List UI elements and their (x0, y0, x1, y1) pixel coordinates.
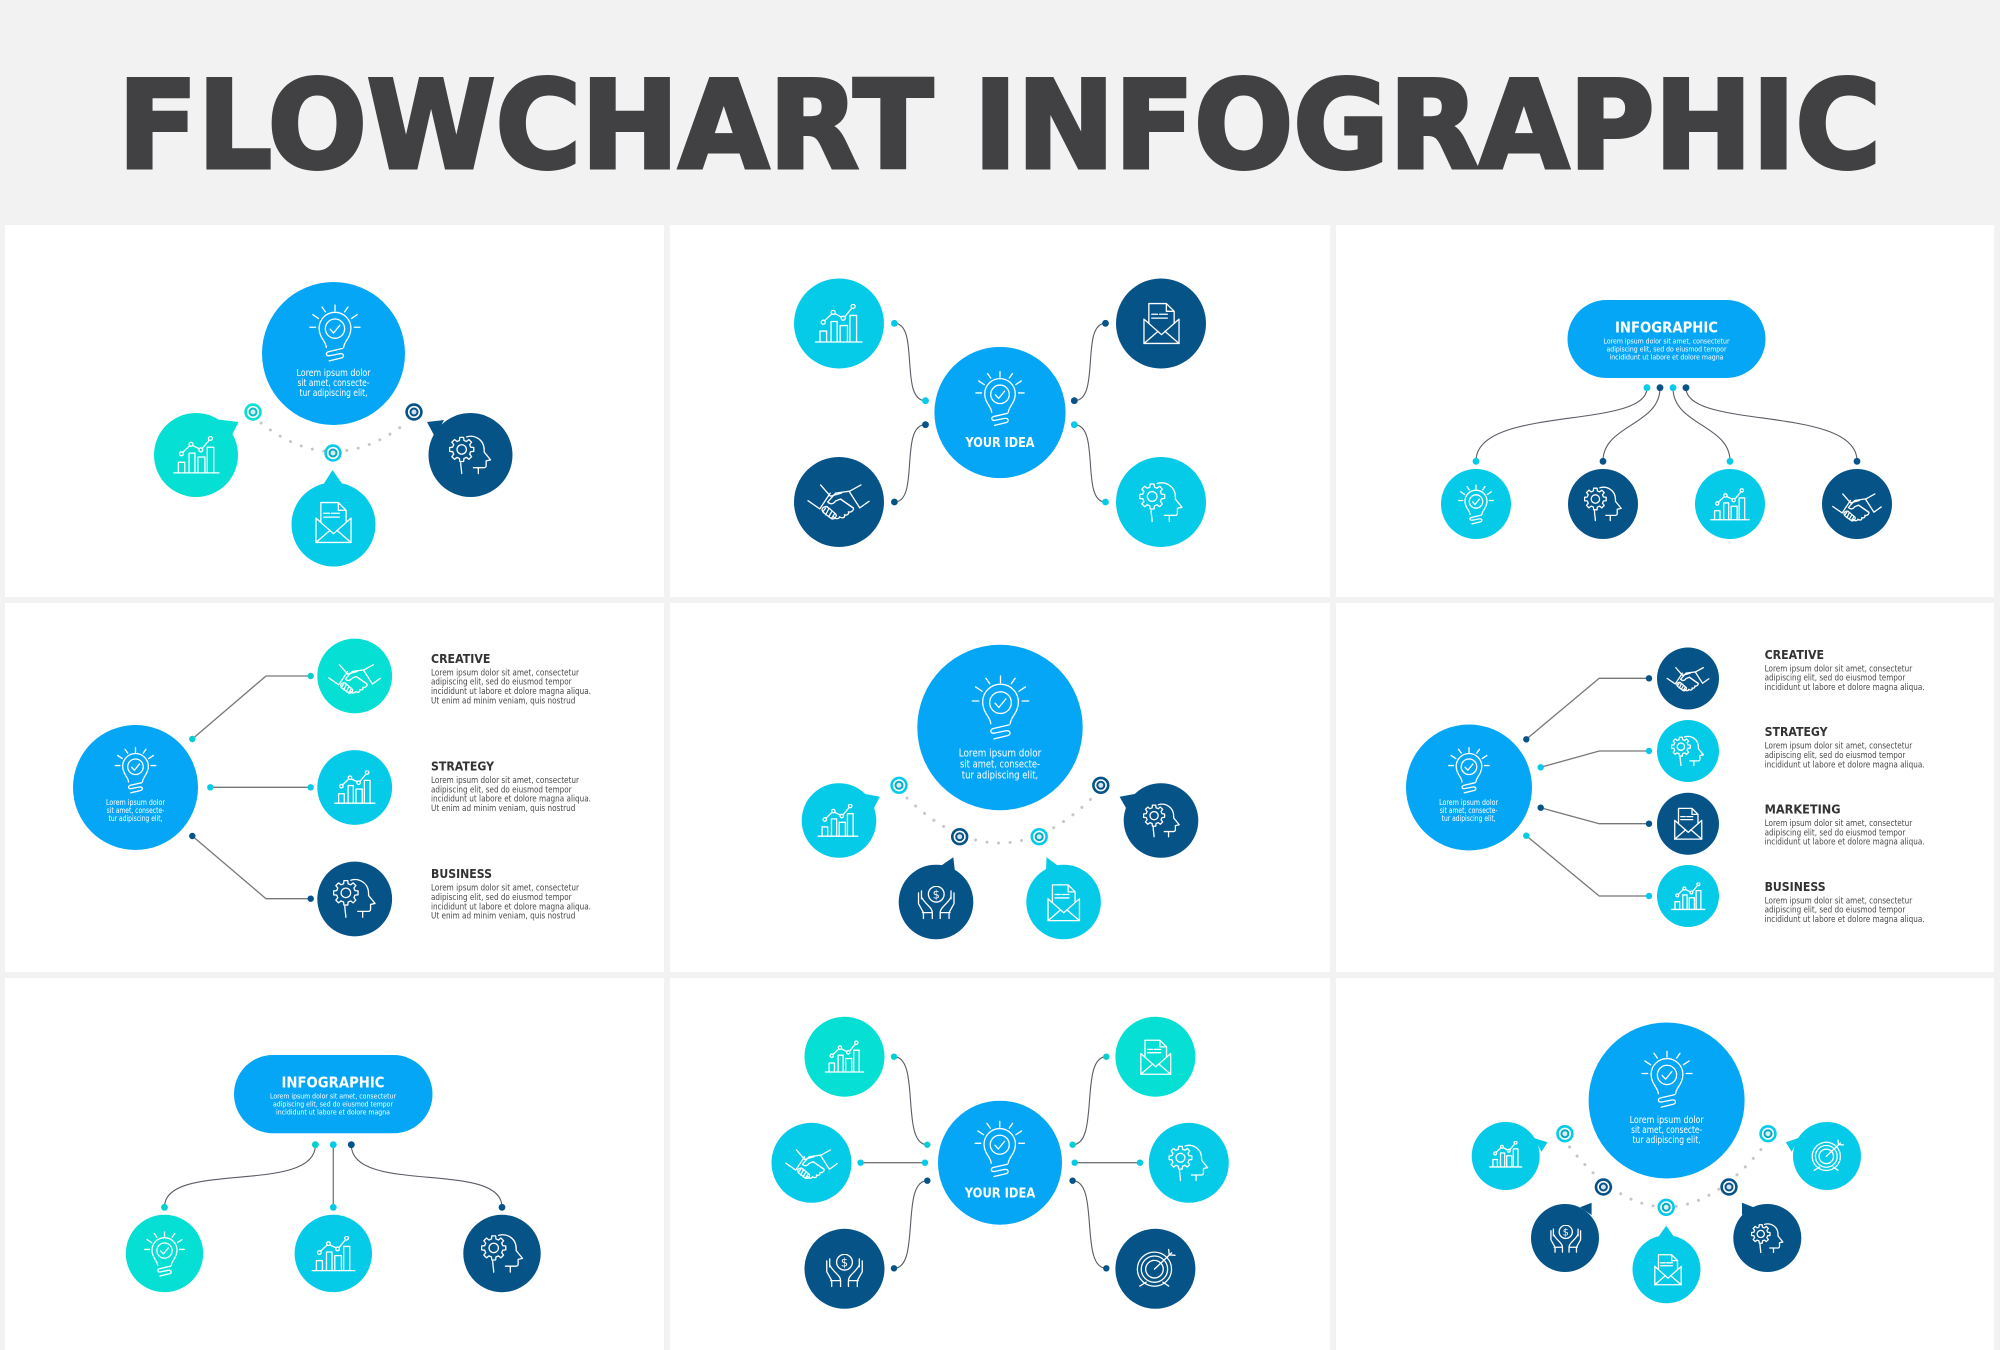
bubble: head (427, 413, 512, 497)
marker: left ring (246, 405, 260, 419)
connector 1 (1473, 384, 1650, 465)
title: FLOWCHART INFOGRAPHIC (118, 54, 1881, 196)
text block: strategy: incididunt ut labore et dolore magna aliqua. (1765, 760, 1925, 770)
text block: strategy: STRATEGY (1765, 725, 1828, 740)
connector bottom right (1069, 1178, 1110, 1272)
text block: business: Lorem ipsum dolor sit amet, consectetur (431, 884, 579, 894)
central circle your idea (938, 1101, 1062, 1225)
circle: chart (317, 750, 392, 825)
dotted arc (261, 423, 406, 452)
pill heading: INFOGRAPHIC (1615, 318, 1718, 336)
circle: envelope (1116, 278, 1206, 368)
dotted arc (1570, 1147, 1763, 1207)
panel: idea with six branches (670, 978, 1330, 1350)
circle: dollar hands (804, 1229, 884, 1309)
circle: head (463, 1215, 541, 1292)
text block: business (431, 867, 591, 922)
text block: strategy: Ut enim ad minim veniam, quis nostrud (431, 804, 575, 814)
bubble: envelope (1026, 857, 1101, 939)
pill heading: Lorem ipsum dolor sit amet, consectetur (1604, 336, 1730, 345)
bubble: envelope (292, 470, 376, 566)
connector middle right (1072, 1160, 1143, 1166)
circle: head (1116, 457, 1206, 547)
circle: envelope (1115, 1017, 1195, 1097)
central circle with bulb: sit amet, consecte- (298, 378, 370, 389)
circle: chart (1657, 865, 1719, 927)
central circle: tur adipiscing elit, (1442, 814, 1496, 823)
bubble: envelope (1632, 1226, 1700, 1303)
connector: creative (1523, 675, 1652, 742)
circle: chart (295, 1215, 372, 1292)
marker ring 1 (1558, 1126, 1572, 1141)
central circle your idea: YOUR IDEA (964, 1186, 1036, 1202)
central circle with bulb: sit amet, consecte- (960, 758, 1040, 770)
panel: radial four speech bubbles (670, 603, 1330, 972)
text block: marketing: MARKETING (1765, 802, 1841, 818)
text block: strategy: Lorem ipsum dolor sit amet, consectetur (1765, 742, 1913, 752)
circle: handshake (772, 1123, 852, 1203)
pill heading: Lorem ipsum dolor sit amet, consectetur (270, 1091, 397, 1100)
circle: bulb (1441, 469, 1511, 539)
circle: envelope (1657, 793, 1719, 855)
text block: business: Ut enim ad minim veniam, quis nostrud (431, 912, 575, 922)
central circle: Lorem ipsum dolor (1439, 798, 1499, 807)
connector: strategy (1538, 748, 1652, 770)
bubble: head (1733, 1203, 1801, 1272)
circle: handshake (1822, 469, 1892, 539)
central circle your idea: YOUR IDEA (965, 435, 1035, 451)
connector middle left (857, 1160, 928, 1166)
connector 4 (1683, 384, 1860, 465)
bubble: dollar hands (899, 857, 973, 939)
circle: handshake (794, 457, 884, 547)
circle: head (1568, 469, 1638, 539)
central circle with bulb: Lorem ipsum dolor (1630, 1115, 1704, 1126)
text block: creative: adipiscing elit, sed do eiusmod tempor (1765, 674, 1906, 684)
text block: business: incididunt ut labore et dolore magna aliqua. (431, 902, 591, 912)
bubble: chart (802, 783, 880, 858)
panel: idea with four branches (670, 225, 1330, 597)
central circle: tur adipiscing elit, (108, 814, 162, 823)
pill heading: adipiscing elit, sed do eiusmod tempor (1606, 344, 1727, 353)
connector bottom left (891, 1178, 930, 1272)
marker ring 4 (1093, 778, 1108, 793)
text block: creative (1765, 648, 1925, 693)
central circle with bulb (1589, 1022, 1745, 1178)
connector: bottom left (891, 421, 929, 505)
connector: marketing (1538, 804, 1652, 827)
central circle with bulb: Lorem ipsum dolor (959, 747, 1042, 759)
central circle with bulb: tur adipiscing elit, (300, 388, 368, 399)
text block: business (1765, 880, 1925, 925)
pill heading: incididunt ut labore et dolore magna (276, 1107, 390, 1116)
circle: chart (804, 1017, 884, 1097)
text block: creative: Lorem ipsum dolor sit amet, consectetur (1765, 664, 1913, 674)
connector: bottom right (1071, 421, 1109, 505)
central circle: Lorem ipsum dolor (106, 798, 166, 807)
text block: creative: Lorem ipsum dolor sit amet, consectetur (431, 668, 579, 678)
text block: creative (431, 652, 591, 706)
connector top right (1069, 1054, 1110, 1148)
text block: strategy (1765, 725, 1925, 770)
text block: creative: CREATIVE (1765, 648, 1824, 663)
text block: creative: CREATIVE (431, 652, 490, 667)
panel: four branches with text (1336, 603, 1994, 972)
bubble: chart (154, 413, 238, 497)
text block: creative: incididunt ut labore et dolore magna aliqua. (1765, 683, 1925, 693)
text block: strategy: adipiscing elit, sed do eiusmod tempor (431, 785, 572, 795)
text block: business: adipiscing elit, sed do eiusmod tempor (1765, 906, 1906, 916)
pill heading (234, 1055, 432, 1133)
marker: middle ring (326, 446, 340, 460)
text block: marketing: adipiscing elit, sed do eiusmod tempor (1765, 828, 1906, 838)
connector: business (1523, 832, 1652, 899)
panel: infographic pill with three branches (5, 978, 664, 1350)
circle: head (317, 862, 392, 936)
marker ring 3 (1659, 1200, 1674, 1215)
marker ring 5 (1761, 1126, 1775, 1141)
connector right (348, 1141, 505, 1211)
circle: handshake (317, 639, 392, 713)
pill heading: INFOGRAPHIC (282, 1073, 384, 1091)
marker ring 1 (892, 778, 906, 793)
text block: strategy: incididunt ut labore et dolore magna aliqua. (431, 795, 591, 805)
pill heading: incididunt ut labore et dolore magna (1610, 352, 1724, 361)
text block: strategy: Lorem ipsum dolor sit amet, consectetur (431, 776, 579, 786)
central circle (1406, 724, 1532, 850)
bubble: target (1786, 1122, 1861, 1190)
central circle (73, 725, 198, 850)
bubble: chart (1472, 1122, 1548, 1190)
circle: handshake (1657, 648, 1719, 710)
circle: bulb (126, 1215, 203, 1292)
text block: strategy: STRATEGY (431, 760, 495, 774)
connector top left (891, 1054, 930, 1148)
marker ring 2 (952, 829, 967, 844)
central circle: sit amet, consecte- (1440, 806, 1498, 815)
text block: business: incididunt ut labore et dolore magna aliqua. (1765, 915, 1925, 925)
connector: top left (891, 320, 929, 404)
marker ring 4 (1722, 1180, 1736, 1194)
panel: three branches with text (5, 603, 664, 972)
connector 2 (1600, 384, 1663, 465)
pill heading (1568, 300, 1766, 378)
circle: target (1115, 1229, 1195, 1309)
marker ring 2 (1596, 1180, 1611, 1194)
pill heading: adipiscing elit, sed do eiusmod tempor (273, 1099, 394, 1108)
text block: creative: incididunt ut labore et dolore magna aliqua. (431, 687, 591, 697)
marker: right ring (407, 405, 421, 419)
text block: business: BUSINESS (1765, 880, 1826, 895)
text block: marketing: Lorem ipsum dolor sit amet, consectetur (1765, 819, 1913, 829)
central circle with bulb (917, 645, 1083, 810)
central circle with bulb (262, 282, 405, 425)
panel: radial three speech bubbles (5, 225, 664, 597)
central circle with bulb: tur adipiscing elit, (962, 770, 1038, 782)
central circle: sit amet, consecte- (107, 806, 165, 815)
connector 3 (1670, 384, 1733, 465)
circle: chart (794, 278, 884, 368)
text block: marketing: incididunt ut labore et dolore magna aliqua. (1765, 838, 1925, 848)
dotted arc (907, 798, 1092, 843)
connector: creative (189, 673, 314, 742)
text block: creative: Ut enim ad minim veniam, quis nostrud (431, 696, 575, 706)
circle: chart (1695, 469, 1765, 539)
panel: infographic pill with four branches (1336, 225, 1994, 597)
central circle with bulb: Lorem ipsum dolor (296, 368, 371, 379)
panel: radial five speech bubbles (1336, 978, 1994, 1350)
bubble: head (1120, 783, 1198, 858)
central circle with bulb: sit amet, consecte- (1631, 1125, 1702, 1136)
text block: marketing (1765, 802, 1925, 848)
circle: head (1657, 720, 1719, 782)
connector: strategy (207, 784, 314, 790)
text block: business: Lorem ipsum dolor sit amet, consectetur (1765, 896, 1913, 906)
connector: business (189, 833, 314, 902)
text block: business: adipiscing elit, sed do eiusmod tempor (431, 893, 572, 903)
circle: head (1149, 1123, 1229, 1203)
text block: strategy: adipiscing elit, sed do eiusmod tempor (1765, 751, 1906, 761)
connector middle (330, 1141, 337, 1211)
connector left (161, 1141, 319, 1211)
connector: top right (1071, 320, 1109, 404)
central circle your idea (934, 347, 1066, 478)
central circle with bulb: tur adipiscing elit, (1633, 1135, 1701, 1146)
marker ring 3 (1032, 829, 1047, 844)
text block: strategy (431, 760, 591, 814)
text block: creative: adipiscing elit, sed do eiusmod tempor (431, 678, 572, 688)
bubble: dollar hands (1531, 1203, 1599, 1272)
text block: business: BUSINESS (431, 867, 492, 882)
